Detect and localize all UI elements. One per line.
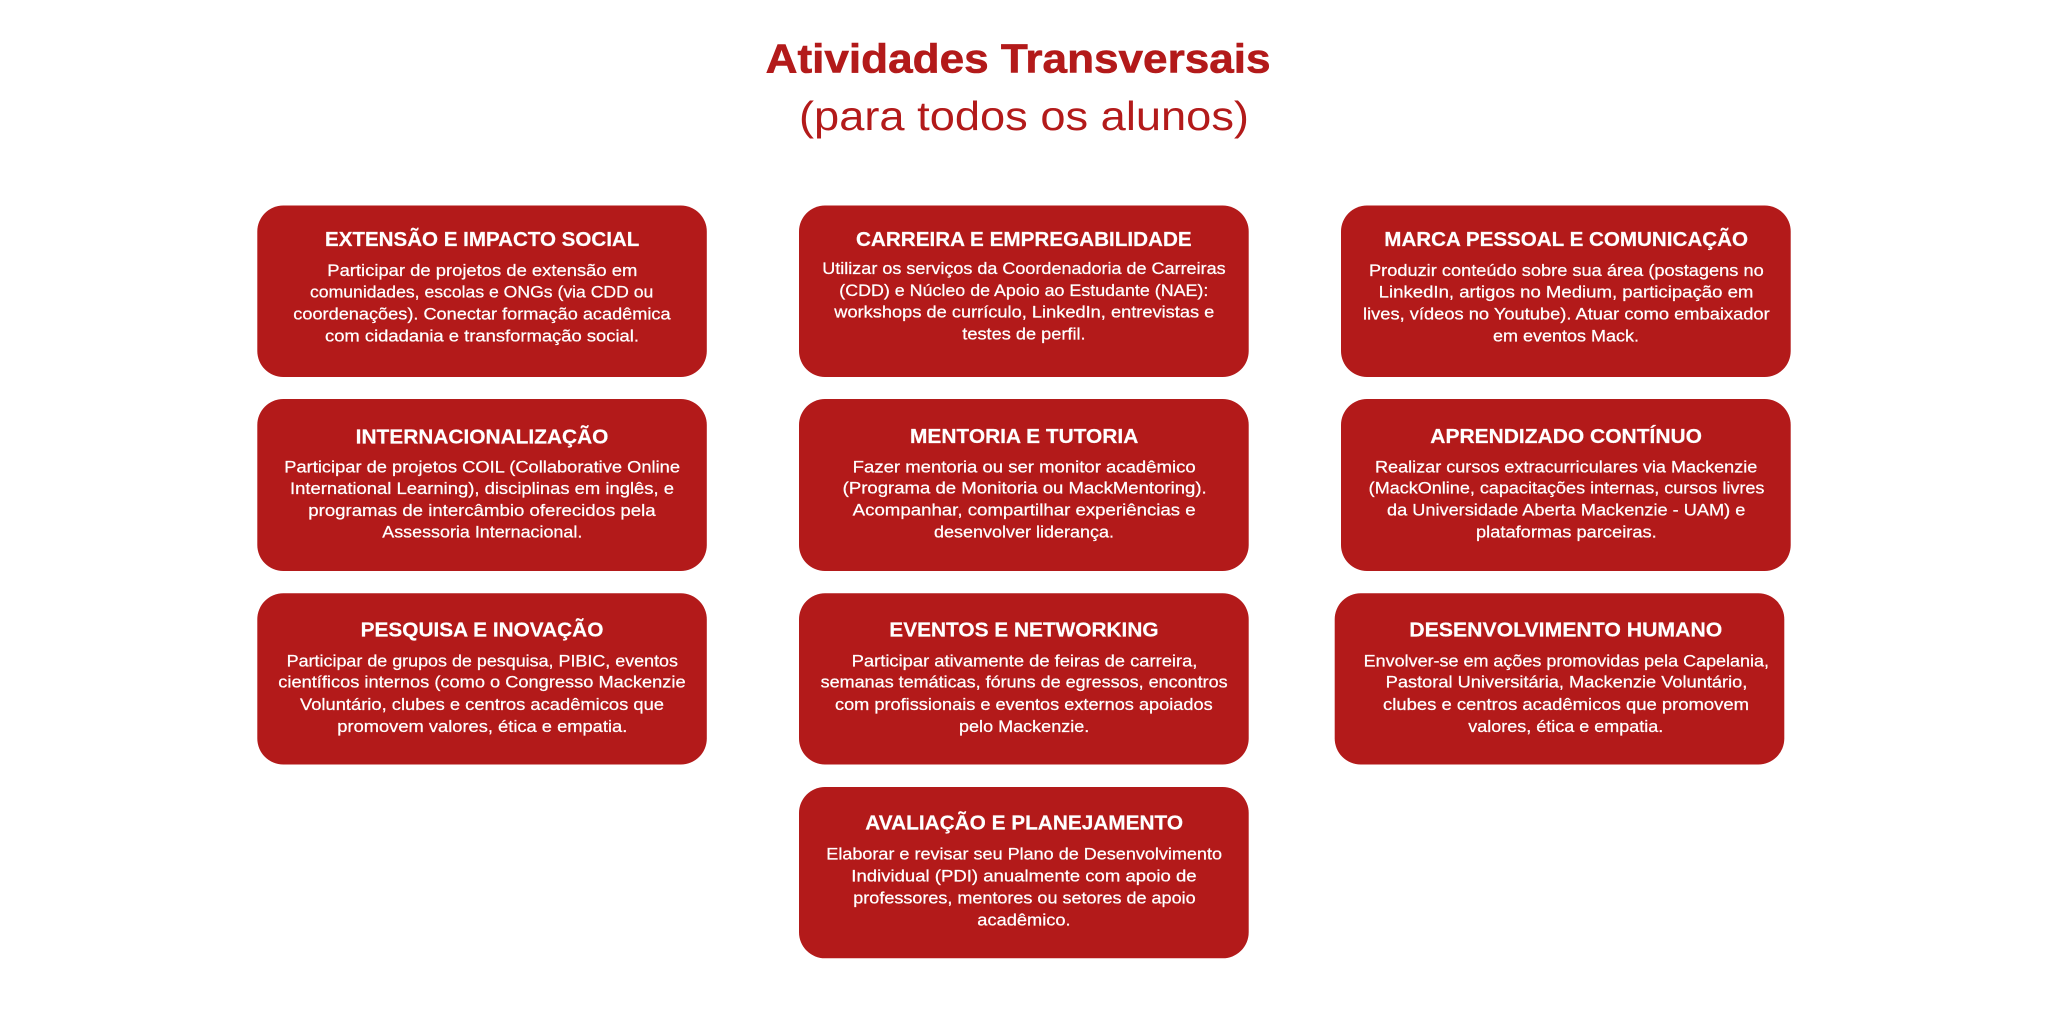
text block: Extensão e Impacto Social: com cidadania e transformação social. [325, 327, 639, 346]
text block: Internacionalização: Participar de projetos COIL (Collaborative Online [284, 458, 680, 477]
text block: Aprendizado Contínuo: plataformas parceiras. [1476, 523, 1657, 542]
heading: Eventos e Networking: EVENTOS E NETWORKING [889, 620, 1159, 642]
heading: Pesquisa e Inovação: PESQUISA E INOVAÇÃO [361, 619, 603, 642]
text block: Extensão e Impacto Social: Participar de projetos de extensão em [327, 261, 637, 280]
text block: Carreira e Empregabilidade [822, 259, 1226, 344]
text block: Marca Pessoal e Comunicação: LinkedIn, artigos no Medium, participação em [1379, 282, 1753, 301]
text block: Eventos e Networking: semanas temáticas, fóruns de egressos, encontros [821, 673, 1228, 692]
panel: Eventos e Networking [799, 593, 1249, 764]
heading: Extensão e Impacto Social: EXTENSÃO E IMPACTO SOCIAL [325, 228, 639, 251]
text block: Marca Pessoal e Comunicação: Produzir conteúdo sobre sua área (postagens no [1369, 261, 1764, 280]
text block: Carreira e Empregabilidade: testes de perfil. [962, 325, 1086, 344]
text block: Mentoria e Tutoria: Acompanhar, compartilhar experiências e [853, 501, 1196, 520]
panel: Aprendizado Contínuo [1341, 399, 1791, 571]
text block: Avaliação e Planejamento: Individual (PDI) anualmente com apoio de [851, 867, 1197, 886]
text block: Internacionalização [284, 458, 680, 542]
text block: Mentoria e Tutoria: (Programa de Monitoria ou MackMentoring). [843, 479, 1207, 498]
text block: Carreira e Empregabilidade: Utilizar os serviços da Coordenadoria de Carreiras [822, 259, 1226, 278]
title: (para todos os alunos) [799, 93, 1249, 139]
text block: Avaliação e Planejamento [826, 845, 1222, 929]
text block: Mentoria e Tutoria [843, 457, 1207, 542]
text block: Avaliação e Planejamento: acadêmico. [977, 910, 1071, 929]
text block: Pesquisa e Inovação: promovem valores, ética e empatia. [337, 717, 627, 736]
panel: Desenvolvimento Humano [1335, 593, 1784, 764]
panel: Mentoria e Tutoria [799, 399, 1249, 571]
text block: Eventos e Networking: Participar ativamente de feiras de carreira, [852, 652, 1197, 671]
text block: Desenvolvimento Humano: Pastoral Universitária, Mackenzie Voluntário, [1386, 673, 1747, 692]
text block: Mentoria e Tutoria: Fazer mentoria ou ser monitor acadêmico [853, 457, 1196, 476]
text block: Extensão e Impacto Social: coordenações). Conectar formação acadêmica [293, 304, 671, 323]
text block: Avaliação e Planejamento: professores, mentores ou setores de apoio [853, 888, 1196, 907]
text block: Internacionalização: Assessoria Internacional. [382, 523, 582, 542]
text block: Extensão e Impacto Social [293, 261, 671, 346]
heading: Internacionalização: INTERNACIONALIZAÇÃO [356, 425, 608, 448]
panel: Extensão e Impacto Social [257, 206, 707, 377]
text block: Mentoria e Tutoria: desenvolver liderança. [934, 523, 1114, 542]
text block: Avaliação e Planejamento: Elaborar e revisar seu Plano de Desenvolvimento [826, 845, 1222, 864]
heading: Aprendizado Contínuo: APRENDIZADO CONTÍNUO [1430, 425, 1702, 448]
heading: Desenvolvimento Humano: DESENVOLVIMENTO HUMANO [1409, 620, 1722, 642]
text block: Extensão e Impacto Social: comunidades, escolas e ONGs (via CDD ou [310, 282, 653, 301]
text block: Carreira e Empregabilidade: workshops de currículo, LinkedIn, entrevistas e [833, 303, 1214, 322]
text block: Desenvolvimento Humano: Envolver-se em ações promovidas pela Capelania, [1364, 652, 1769, 671]
panel: Marca Pessoal e Comunicação [1341, 206, 1791, 377]
text block: Aprendizado Contínuo [1369, 457, 1764, 542]
panel: Carreira e Empregabilidade [799, 206, 1249, 377]
text block: Aprendizado Contínuo: da Universidade Aberta Mackenzie - UAM) e [1387, 501, 1745, 520]
panel: Pesquisa e Inovação [257, 593, 707, 764]
text block: Marca Pessoal e Comunicação: lives, vídeos no Youtube). Atuar como embaixador [1363, 304, 1770, 323]
title [766, 36, 1271, 139]
text block: Aprendizado Contínuo: Realizar cursos extracurriculares via Mackenzie [1375, 457, 1757, 476]
panel: Avaliação e Planejamento [799, 787, 1249, 958]
text block: Marca Pessoal e Comunicação: em eventos Mack. [1493, 327, 1639, 346]
text block: Pesquisa e Inovação [278, 652, 686, 736]
panel: Internacionalização [257, 399, 707, 571]
heading: Avaliação e Planejamento: AVALIAÇÃO E PLANEJAMENTO [865, 812, 1183, 835]
text block: Marca Pessoal e Comunicação [1363, 261, 1770, 346]
text block: Internacionalização: International Learning), disciplinas em inglês, e [290, 479, 674, 498]
text block: Carreira e Empregabilidade: (CDD) e Núcleo de Apoio ao Estudante (NAE): [839, 281, 1208, 300]
text block: Eventos e Networking: com profissionais e eventos externos apoiados [835, 695, 1213, 714]
text block: Pesquisa e Inovação: Participar de grupos de pesquisa, PIBIC, eventos [287, 652, 678, 671]
text block: Desenvolvimento Humano [1364, 652, 1769, 736]
text block: Desenvolvimento Humano: clubes e centros acadêmicos que promovem [1383, 695, 1749, 714]
text block: Eventos e Networking: pelo Mackenzie. [959, 717, 1089, 736]
text block: Eventos e Networking [821, 652, 1228, 736]
text block: Internacionalização: programas de intercâmbio oferecidos pela [308, 501, 656, 520]
text block: Pesquisa e Inovação: Voluntário, clubes e centros acadêmicos que [300, 695, 664, 714]
text block: Desenvolvimento Humano: valores, ética e empatia. [1468, 717, 1663, 736]
title: Atividades Transversais [766, 36, 1271, 82]
heading: Marca Pessoal e Comunicação: MARCA PESSOAL E COMUNICAÇÃO [1384, 228, 1748, 251]
heading: Mentoria e Tutoria: MENTORIA E TUTORIA [910, 426, 1138, 448]
text block: Pesquisa e Inovação: científicos internos (como o Congresso Mackenzie [278, 673, 686, 692]
heading: Carreira e Empregabilidade: CARREIRA E EMPREGABILIDADE [856, 229, 1192, 251]
text block: Aprendizado Contínuo: (MackOnline, capacitações internas, cursos livres [1369, 479, 1764, 498]
